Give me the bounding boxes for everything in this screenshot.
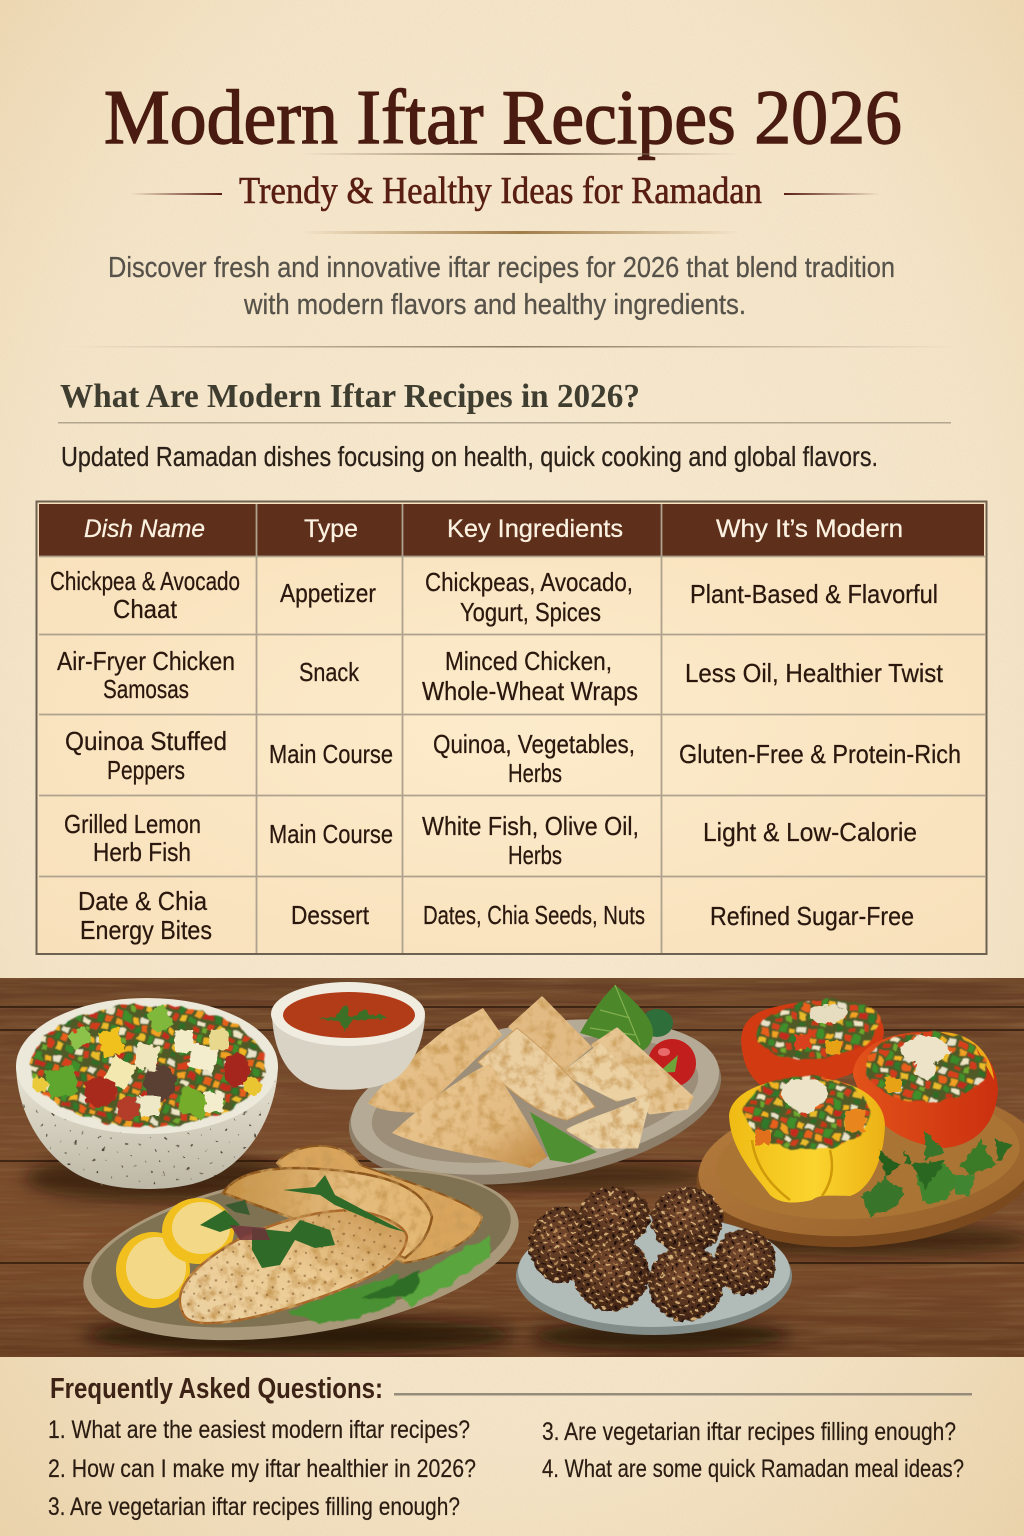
- title: Modern Iftar Recipes 2026: [104, 74, 902, 160]
- section description: Updated Ramadan dishes focusing on health, quick cooking and global flavors.: [61, 441, 878, 472]
- samosa plate: [349, 984, 721, 1184]
- leaf and tomato garnish: [580, 985, 696, 1087]
- row: grilled lemon herb fish: Grilled Lemon: [64, 809, 201, 839]
- date chia energy bites plate: [516, 1187, 792, 1335]
- food photo illustration: [0, 978, 1024, 1367]
- row: date chia energy bites: Energy Bites: [80, 915, 212, 945]
- row: date chia energy bites: Dates, Chia Seeds, Nuts: [423, 900, 645, 930]
- row: air-fryer samosas: Less Oil, Healthier Twist: [685, 658, 944, 688]
- FAQ left column: 1. What are the easiest modern iftar recipes?: [48, 1416, 470, 1444]
- row: quinoa stuffed peppers: Quinoa Stuffed: [65, 726, 227, 756]
- FAQ left column: 3. Are vegetarian iftar recipes filling enough?: [48, 1493, 460, 1521]
- section heading: What Are Modern Iftar Recipes in 2026?: [60, 378, 640, 415]
- table header row: Type: [304, 515, 358, 543]
- row: grilled lemon herb fish: White Fish, Olive Oil,: [422, 811, 639, 841]
- row: chickpea avocado chaat: Chaat: [113, 594, 178, 624]
- row: grilled lemon herb fish: Light & Low-Calorie: [703, 817, 917, 847]
- row: quinoa stuffed peppers: Quinoa, Vegetables,: [433, 729, 635, 759]
- row: chickpea avocado chaat: Chickpeas, Avocado,: [425, 567, 633, 597]
- row: grilled lemon herb fish: Herbs: [508, 840, 562, 870]
- row: date chia energy bites: Date & Chia: [78, 886, 207, 916]
- FAQ section: [48, 1373, 972, 1521]
- row: chickpea avocado chaat: [50, 566, 938, 627]
- row: grilled lemon herb fish: [64, 809, 917, 870]
- intro paragraph: [108, 252, 895, 321]
- row: chickpea avocado chaat: Appetizer: [280, 578, 376, 608]
- row: quinoa stuffed peppers: Gluten-Free & Protein-Rich: [679, 739, 961, 769]
- lemon slices: [116, 1198, 234, 1308]
- chaat salad bowl: [16, 998, 278, 1189]
- row: grilled lemon herb fish: Herb Fish: [93, 837, 191, 867]
- FAQ left column: 2. How can I make my iftar healthier in 2026?: [48, 1455, 476, 1483]
- fish fillets: [180, 1146, 482, 1323]
- recipe table: [36, 502, 986, 954]
- row: quinoa stuffed peppers: Herbs: [508, 758, 562, 788]
- row: air-fryer samosas: [57, 646, 944, 706]
- FAQ right column: [542, 1418, 964, 1483]
- table header row: Why It’s Modern: [716, 515, 903, 543]
- row: air-fryer samosas: Minced Chicken,: [445, 646, 612, 676]
- table header row: [39, 504, 984, 556]
- red pepper: [741, 992, 884, 1088]
- row: date chia energy bites: Refined Sugar-Free: [710, 901, 914, 931]
- tomato sauce bowl: [271, 982, 425, 1090]
- row: air-fryer samosas: Whole-Wheat Wraps: [422, 676, 638, 706]
- row: date chia energy bites: [78, 886, 914, 945]
- row: date chia energy bites: Dessert: [291, 900, 370, 930]
- intro paragraph: with modern flavors and healthy ingredients.: [243, 289, 746, 321]
- row: air-fryer samosas: Snack: [299, 657, 360, 687]
- row: air-fryer samosas: Samosas: [103, 674, 189, 704]
- green pepper wedge: [530, 1112, 597, 1163]
- row: chickpea avocado chaat: Yogurt, Spices: [460, 597, 601, 627]
- table header row: Dish Name: [84, 515, 205, 543]
- row: chickpea avocado chaat: Chickpea & Avocado: [50, 566, 240, 596]
- FAQ right column: 3. Are vegetarian iftar recipes filling enough?: [542, 1418, 956, 1446]
- row: grilled lemon herb fish: Main Course: [269, 819, 393, 849]
- table header row: Key Ingredients: [447, 515, 623, 543]
- wooden plate with stuffed peppers: [690, 992, 1024, 1261]
- header block: [104, 74, 902, 321]
- FAQ left column: [48, 1416, 476, 1521]
- FAQ heading: Frequently Asked Questions:: [50, 1373, 383, 1405]
- grilled lemon fish plate: [83, 1144, 519, 1340]
- yellow pepper: [729, 1076, 885, 1203]
- row: chickpea avocado chaat: Plant-Based & Flavorful: [690, 579, 938, 609]
- subtitle: Trendy & Healthy Ideas for Ramadan: [239, 170, 762, 212]
- row: quinoa stuffed peppers: [65, 726, 961, 788]
- samosas: [368, 998, 692, 1168]
- herb topping: [200, 1175, 405, 1268]
- row: air-fryer samosas: Air-Fryer Chicken: [57, 646, 235, 676]
- intro paragraph: Discover fresh and innovative iftar recipes for 2026 that blend tradition: [108, 252, 895, 284]
- energy bites: [529, 1187, 776, 1321]
- row: quinoa stuffed peppers: Main Course: [269, 739, 393, 769]
- orange pepper: [853, 1032, 998, 1148]
- row: quinoa stuffed peppers: Peppers: [107, 755, 185, 785]
- herb garnish: [862, 1130, 1012, 1216]
- salad greens: [288, 1235, 490, 1322]
